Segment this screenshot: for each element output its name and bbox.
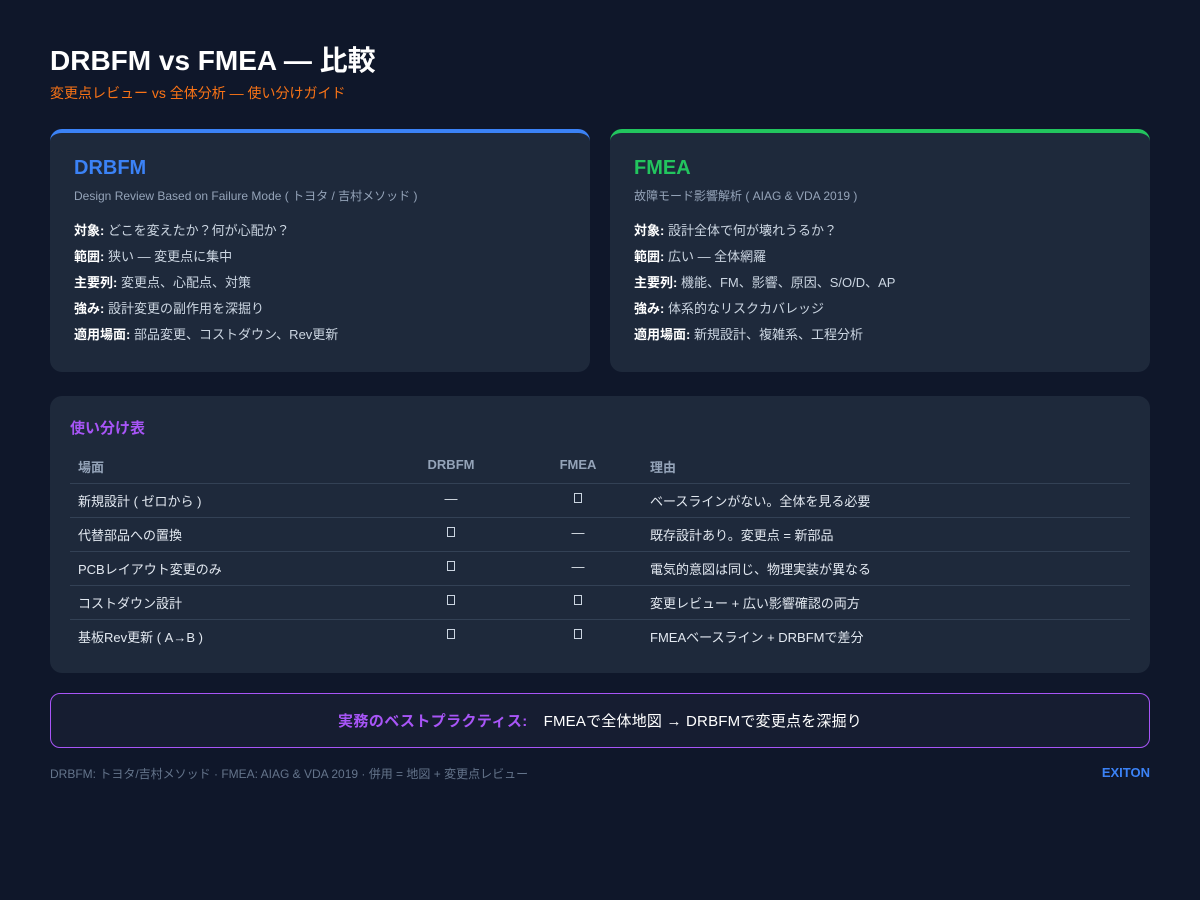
text block: FMEA attributes: 範囲: 広い — 全体網羅 bbox=[634, 249, 766, 264]
table heading: 使い分け表 bbox=[70, 420, 145, 437]
table row 5: 基板Rev更新 ( A→B ) bbox=[78, 630, 203, 645]
text block: DRBFM attributes bbox=[74, 223, 338, 342]
text block: FMEA attributes bbox=[634, 223, 895, 342]
table row 2: 既存設計あり。変更点 = 新部品 bbox=[650, 528, 834, 543]
table header row bbox=[78, 457, 676, 475]
table row 4: コストダウン設計 bbox=[78, 596, 182, 611]
callout: best practice bbox=[50, 693, 1150, 748]
table row 3: — bbox=[572, 559, 584, 574]
table row 2 bbox=[70, 517, 1130, 551]
table row 3: PCBレイアウト変更のみ bbox=[78, 562, 222, 577]
subheading: Design Review Based on Failure Mode ( トヨタ / 吉村メソッド ) bbox=[74, 189, 417, 203]
callout: best practice: 実務のベストプラクティス: FMEAで全体地図 → DRBFMで変更点を深掘り bbox=[338, 713, 862, 730]
table row 1 bbox=[70, 483, 1130, 517]
text block: DRBFM attributes: 範囲: 狭い — 変更点に集中 bbox=[74, 249, 232, 264]
table row 5: FMEAベースライン + DRBFMで差分 bbox=[650, 630, 864, 645]
table row 1: 新規設計 ( ゼロから ) bbox=[78, 494, 202, 509]
table row 1: — bbox=[444, 491, 458, 506]
table row 5 bbox=[70, 619, 1130, 653]
table row 3 bbox=[70, 551, 1130, 585]
heading: DRBFM: DRBFM bbox=[74, 157, 146, 179]
table row 2: 代替部品への置換 bbox=[78, 528, 182, 543]
table row 3: 電気的意図は同じ、物理実装が異なる bbox=[650, 562, 871, 577]
panel: DRBFM bbox=[50, 129, 590, 372]
footer brand: EXITON bbox=[1102, 765, 1150, 780]
table row 2: — bbox=[572, 525, 584, 540]
panel: FMEA bbox=[610, 129, 1150, 372]
table header row: 理由 bbox=[650, 460, 676, 475]
subheading: 故障モード影響解析 ( AIAG & VDA 2019 ) bbox=[634, 189, 857, 203]
table row 4 bbox=[70, 585, 1130, 619]
table header row: DRBFM bbox=[428, 457, 474, 472]
panel: usage table bbox=[50, 396, 1150, 673]
table header row: FMEA bbox=[560, 457, 596, 472]
subtitle: 変更点レビュー vs 全体分析 — 使い分けガイド bbox=[50, 85, 346, 101]
heading: FMEA: FMEA bbox=[634, 157, 691, 179]
table row 1: ベースラインがない。全体を見る必要 bbox=[650, 494, 870, 509]
text block: DRBFM attributes: 主要列: 変更点、心配点、対策 bbox=[74, 275, 251, 290]
footer note: DRBFM: トヨタ/吉村メソッド · FMEA: AIAG & VDA 2019 · 併用 = 地図 + 変更点レビュー bbox=[50, 767, 528, 781]
table header row: 場面 bbox=[78, 460, 104, 475]
text block: FMEA attributes: 強み: 体系的なリスクカバレッジ bbox=[634, 301, 824, 316]
text block: FMEA attributes: 主要列: 機能、FM、影響、原因、S/O/D、AP bbox=[634, 275, 895, 290]
text block: FMEA attributes: 適用場面: 新規設計、複雑系、工程分析 bbox=[634, 327, 863, 342]
text block: DRBFM attributes: 強み: 設計変更の副作用を深掘り bbox=[74, 301, 264, 316]
table row 4: 変更レビュー + 広い影響確認の両方 bbox=[650, 596, 860, 611]
title: DRBFM vs FMEA — 比較 bbox=[50, 45, 376, 76]
text block: DRBFM attributes: 適用場面: 部品変更、コストダウン、Rev更新 bbox=[74, 327, 338, 342]
text block: FMEA attributes: 対象: 設計全体で何が壊れうるか？ bbox=[634, 223, 837, 238]
text block: DRBFM attributes: 対象: どこを変えたか？何が心配か？ bbox=[74, 223, 290, 238]
